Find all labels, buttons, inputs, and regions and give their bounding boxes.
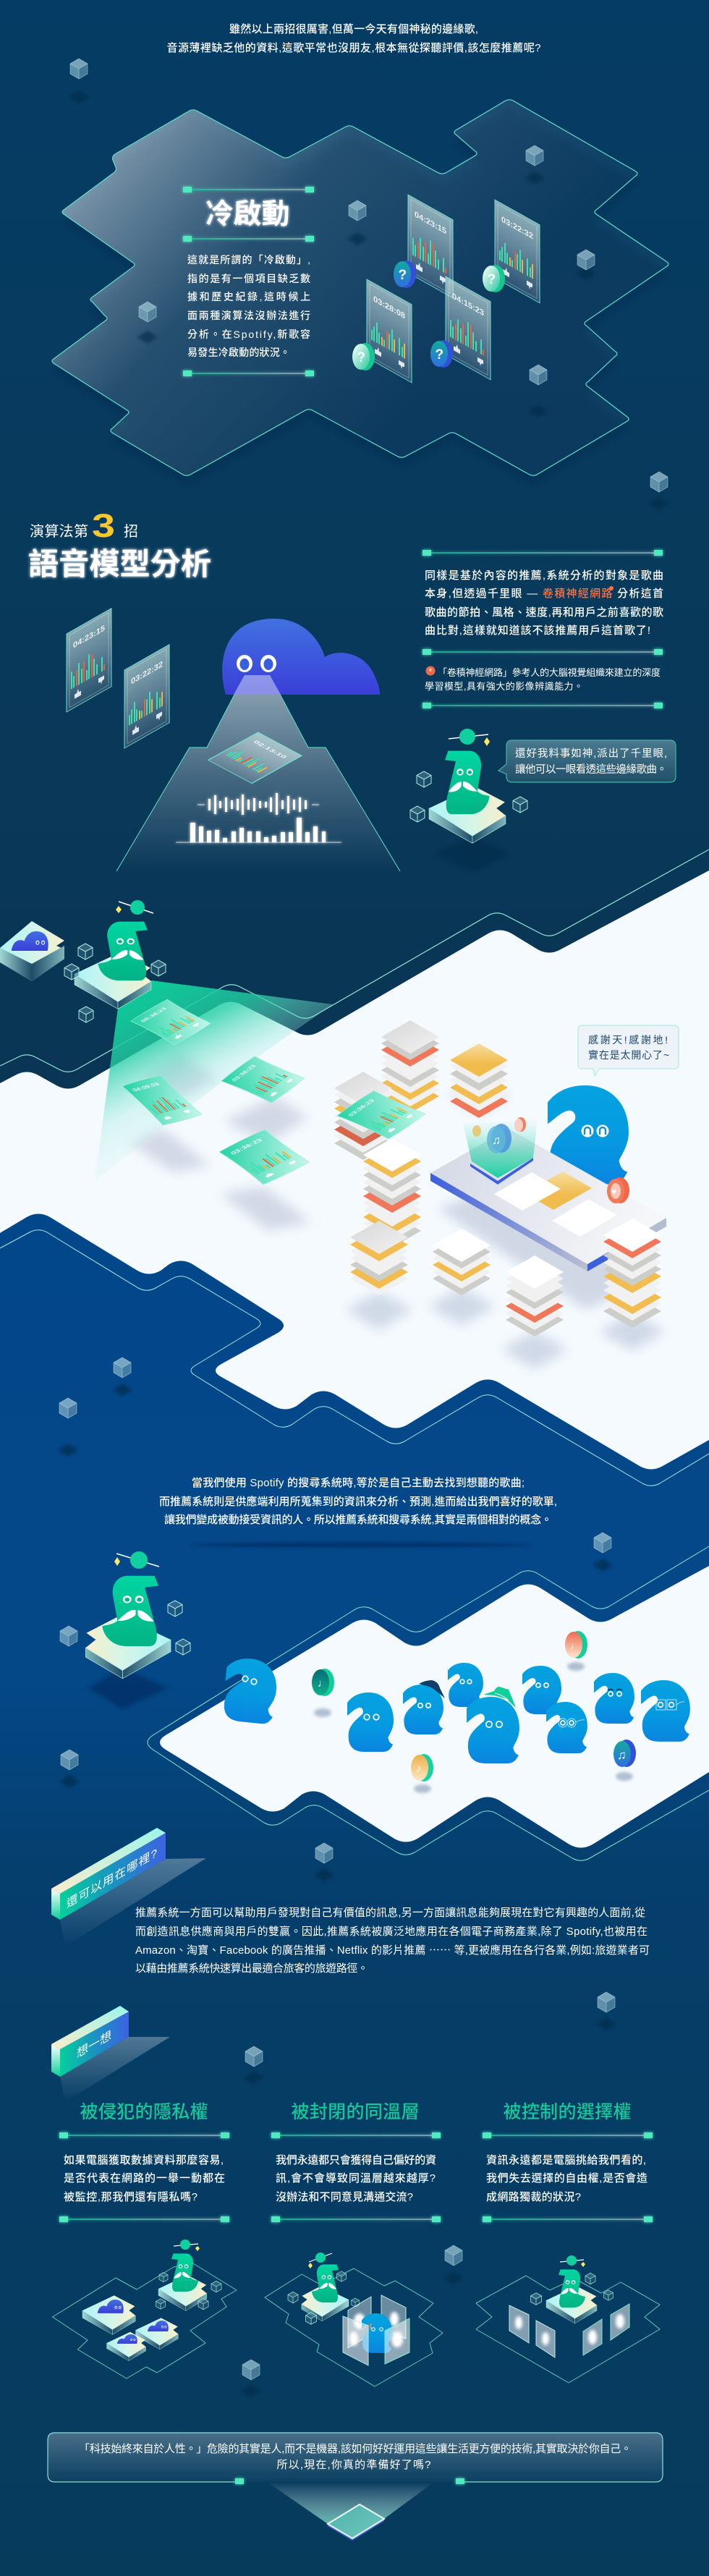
song screens with question badges: 04:15:23 [452, 291, 484, 318]
song screens with question badges [352, 195, 540, 383]
text block: voice model explanation: 曲比對,這樣就知道該不該推薦用戶這首歌了! [425, 624, 650, 637]
text block: search versus recommendation [159, 1476, 557, 1526]
closing callout box [48, 2433, 663, 2484]
text block: voice model explanation: 歌曲的節拍、風格、速度,再和用戶之前喜歡的歌 [425, 606, 663, 619]
illustration: blue cloud with eyes [222, 619, 380, 695]
illustration: song card over stack [336, 1090, 426, 1139]
column 1: privacy: 被侵犯的隱私權 [80, 2102, 208, 2122]
chart: audio waveform [198, 793, 319, 815]
label: where else can it be used: 還可以用在哪裡? [67, 1846, 157, 1911]
chart: audio spectrum bars [176, 818, 341, 843]
song screens with question badges: ? [488, 272, 496, 287]
column 1: privacy: 被監控,那我們還有隱私嗎? [64, 2190, 198, 2203]
illustration: flying song cards: 04:09:06 [131, 1081, 161, 1093]
text block: search versus recommendation: 當我們使用 Spotify 的搜尋系統時,等於是自己主動去找到想聽的歌曲; [192, 1476, 525, 1489]
heading: algorithm move 3: 語音模型分析 [28, 547, 211, 581]
column 2: echo chamber [271, 2102, 441, 2222]
illustration: floating music coins: ♫ [617, 1748, 627, 1762]
illustration: green light beam [95, 980, 333, 1181]
column 3: choice [483, 2102, 653, 2222]
illustration: two song screens: 03:22:32 [131, 658, 163, 687]
illustration: song card over stack: 03:36:23 [347, 1098, 376, 1117]
text block: voice model explanation: 本身,但透過千里眼 — 卷積神經網路 分析這首 [425, 587, 663, 600]
icon: tablet with light beam [267, 2482, 434, 2541]
text block: voice model explanation: * [429, 666, 433, 677]
illustration: record stacks front row [334, 1072, 666, 1369]
illustration: scanned song card [208, 732, 302, 784]
illustration: two song screens [67, 609, 169, 748]
panel: cold start [52, 100, 668, 486]
illustration: floating music coins: ♩ [318, 1677, 328, 1690]
illustration: floating music coins [312, 1631, 636, 1793]
text block: voice model explanation: 學習模型,具有強大的影像辨識能力。 [425, 681, 583, 692]
callout: speech bubble: 讓他可以一眼看透這些邊緣歌曲。 [515, 763, 667, 776]
text block: voice model explanation: 「卷積神經網路」參考人的大腦視覺組織來建立的深度 [438, 667, 661, 678]
closing callout box: 「科技始終來自於人性。」危險的其實是人,而不是機器,該如何好好運用這些讓生活更方便的技術,其實取決於你自己。 [79, 2442, 632, 2455]
panel body text: 據和歷史紀錄,這時候上 [187, 291, 310, 302]
illustration: heart coin: ♥ [611, 1187, 616, 1197]
beam outline [116, 675, 245, 871]
column 3: choice: 成網路獨裁的狀況? [486, 2191, 581, 2203]
outline: white field edge line [148, 1546, 709, 1860]
intro text: 音源薄裡缺乏他的資料,這歌平常也沒朋友,根本無從探聽評價,該怎麼推薦呢? [166, 41, 541, 54]
label: where else can it be used [51, 1828, 206, 1946]
column 3: choice: 資訊永遠都是電腦挑給我們看的, [486, 2153, 646, 2166]
song screens with question badges: 03:22:32 [501, 214, 533, 242]
callout: speech bubble: 還好我料事如神,派出了千里眼, [515, 747, 667, 760]
text block: applications: Amazon、淘寶、Facebook 的廣告推播、Netflix 的影片推薦 ⋯⋯ 等,更被應用在各行各業,例如:旅遊業者可 [135, 1944, 650, 1957]
song screens with question badges: ? [436, 347, 443, 363]
illustration: scanned song card: 02:13:10 [252, 740, 288, 760]
heading: algorithm move 3: 3 [92, 507, 115, 544]
closing callout box: 所以,現在,你真的準備好了嗎? [276, 2458, 431, 2471]
illustration: big blue character [548, 1085, 629, 1185]
illustration: table [430, 1129, 666, 1310]
song screens with question badges: ? [357, 350, 365, 365]
column 2: echo chamber: 沒辦法和不同意見溝通交流? [276, 2190, 413, 2203]
panel body text: 易發生冷啟動的狀況。 [187, 347, 290, 358]
outline: top band edge line [0, 850, 709, 1072]
illustration: music hologram box [463, 1117, 538, 1185]
intro text [166, 22, 541, 54]
floating cubes: blue section [58, 1357, 616, 2084]
heading: algorithm move 3: 演算法第 [30, 523, 88, 540]
illustration: flying song cards [122, 999, 310, 1185]
illustration: music hologram box: ♫ [492, 1135, 501, 1147]
column 2: echo chamber: 訊,會不會導致同溫層越來越厚? [276, 2172, 436, 2185]
illustration: floating music coins: ♩ [570, 1640, 581, 1652]
label: think about it [51, 2006, 170, 2102]
illustration: floating music coins: ♪ [416, 1763, 421, 1775]
column 1: privacy: 是否代表在網路的一舉一動都在 [64, 2172, 225, 2185]
beam outline right [270, 675, 400, 871]
illustration: flying song cards: 03:36:23 [229, 1137, 264, 1156]
text block: voice model explanation [423, 550, 663, 708]
heading: algorithm move 3 [28, 507, 211, 581]
text block: applications: 推薦系統一方面可以幫助用戶發現對自己有價值的訊息,另一方面讓訊息能夠展現在對它有興趣的人面前,從 [135, 1906, 645, 1919]
column 1: privacy [59, 2102, 229, 2222]
panel body text [187, 254, 310, 358]
text block: applications: 而創造訊息供應商與用戶的雙贏。因此,推薦系統被廣泛地應用在各個電子商務產業,除了 Spotify,也被用在 [135, 1925, 648, 1938]
panel body text: 面兩種演算法沒辦法進行 [187, 310, 310, 321]
intro text: 雖然以上兩招很厲害,但萬一今天有個神秘的邊緣歌, [229, 22, 478, 35]
illustration: scanner beam [116, 675, 400, 871]
column 2: echo chamber: 我們永遠都只會獲得自己偏好的資 [276, 2153, 436, 2166]
column 3: choice: 我們失去選擇的自由權,是否會造 [486, 2172, 648, 2185]
character: green note on blue field [60, 1551, 190, 1709]
illustration: big character eyes [582, 1124, 609, 1137]
decorative text shadow [190, 1543, 531, 1547]
icon: privacy platforms with clouds [52, 2240, 237, 2378]
song screens with question badges: 03:28:08 [373, 294, 405, 321]
label: think about it: 想一想 [77, 2028, 111, 2061]
illustration: card shadows on white [130, 1053, 311, 1230]
background: top zigzag band [0, 0, 709, 1088]
text block: search versus recommendation: 讓我們變成被動接受資訊的人。所以推薦系統和搜尋系統,其實是兩個相對的概念。 [164, 1513, 552, 1526]
illustration: flying song cards: 06:36:23 [140, 1007, 169, 1023]
text block: voice model explanation: 同樣是基於內容的推薦,系統分析的對象是歌曲 [425, 569, 663, 582]
callout: thank you bubble [578, 1025, 679, 1076]
callout: thank you bubble: 實在是太開心了~ [588, 1049, 669, 1061]
panel body text: 分析。在Spotify,新歌容 [187, 329, 310, 340]
character: green note sending songs [64, 900, 166, 1022]
icon: controlled choice panels [476, 2255, 660, 2383]
illustration: blue characters crowd [221, 1656, 690, 1763]
panel title bars [183, 187, 314, 376]
text block: applications [135, 1906, 650, 1975]
illustration: heart coin [607, 1177, 629, 1203]
floating cubes: top section [69, 59, 669, 510]
outline: lower blue edge line [0, 1230, 709, 1486]
background: lower blue zigzag area [0, 1214, 709, 2576]
character: green note on platform [410, 729, 527, 873]
column 1: privacy: 如果電腦獲取數據資料那麼容易, [64, 2153, 224, 2166]
text block: applications: 以藉由推薦系統快速算出最適合旅客的旅遊路徑。 [135, 1962, 368, 1975]
illustration: two song screens: 04:23:15 [73, 622, 105, 651]
song screens with question badges: ? [398, 268, 407, 283]
panel body text: 這就是所謂的「冷啟動」, [187, 254, 310, 266]
song screens with question badges: 04:23:15 [415, 209, 446, 237]
illustration: platform with cloud [0, 921, 64, 981]
column 2: echo chamber: 被封閉的同溫層 [291, 2102, 420, 2122]
panel title: 冷啟動 [205, 199, 290, 230]
icon: echo chamber panels [265, 2253, 443, 2386]
column 3: choice: 被控制的選擇權 [504, 2102, 631, 2122]
illustration: flying song cards: 03:36:23 [230, 1064, 258, 1082]
callout: speech bubble [498, 740, 676, 782]
illustration: record stacks back row [381, 1020, 510, 1118]
text block: search versus recommendation: 而推薦系統則是供應端利用所蒐集到的資訊來分析、預測,進而給出我們喜好的歌單, [159, 1495, 557, 1508]
floating cubes: bottom section [241, 2245, 464, 2397]
panel body text: 指的是有一個項目缺乏數 [187, 273, 310, 284]
heading: algorithm move 3: 招 [124, 523, 138, 540]
callout: thank you bubble: 感謝天!感謝地! [588, 1034, 668, 1046]
